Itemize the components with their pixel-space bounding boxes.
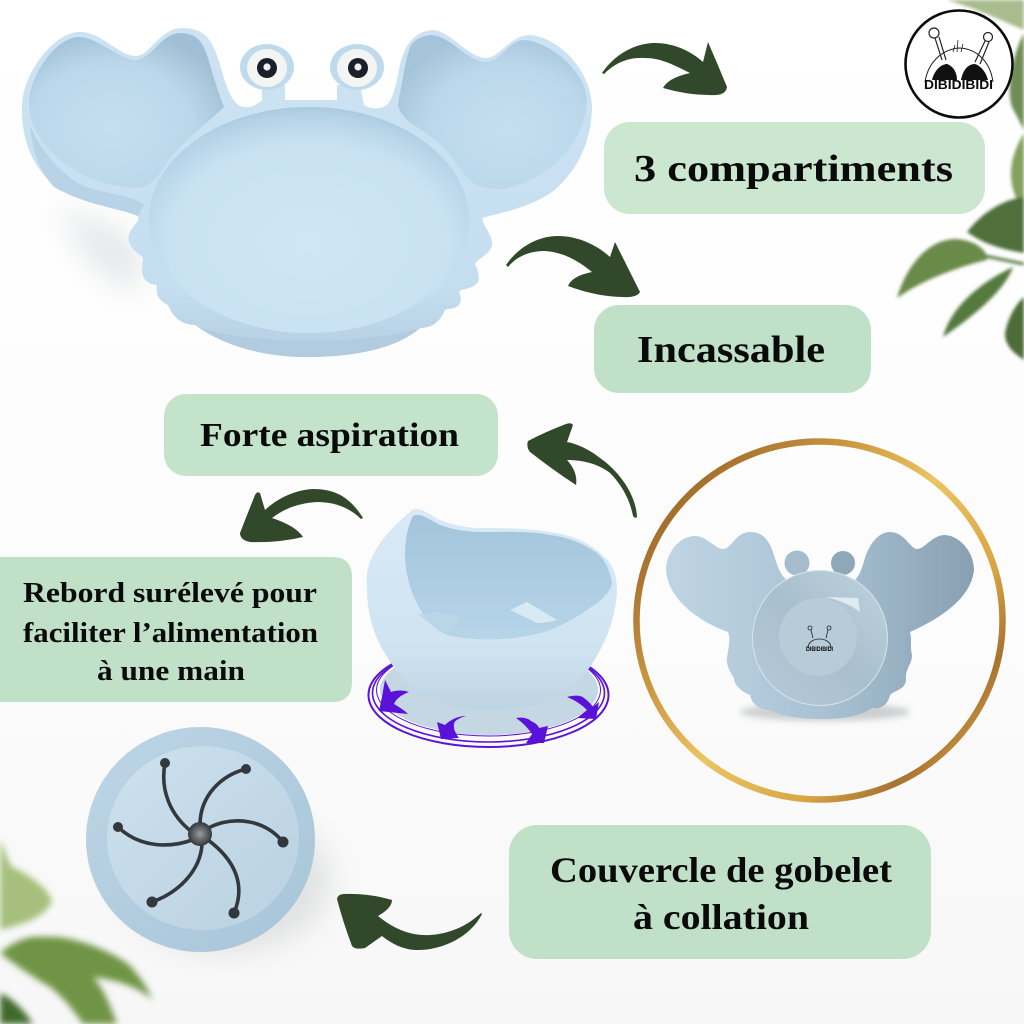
plant top right [897, 0, 1024, 360]
arrow to Forte aspiration [527, 423, 637, 518]
plate front wall [200, 328, 420, 357]
back body [666, 532, 974, 719]
label: 3 compartiments: 3 compartiments [634, 148, 953, 190]
gold circle [636, 442, 1002, 800]
label: Rebord: faciliter l’alimentation [23, 617, 318, 649]
suction bowl [367, 509, 617, 747]
lid shadow [120, 808, 330, 952]
crab plate back view [666, 532, 974, 721]
logo dome [925, 48, 993, 82]
label: Forte aspiration: Forte aspiration [200, 417, 459, 454]
disk center [779, 598, 857, 676]
bowl highlight [510, 602, 557, 623]
logo [906, 10, 1012, 118]
lid inner [107, 746, 299, 930]
label: Rebord [0, 557, 352, 702]
slit ends [113, 758, 288, 918]
suction base [380, 645, 598, 735]
arrow to Rebord [240, 489, 363, 542]
suction disk [752, 570, 888, 706]
back eyes [784, 550, 810, 576]
logo text: DIBIDIBIDI [924, 78, 993, 92]
purple arrows [379, 680, 599, 743]
left eye [240, 44, 294, 90]
logo antennae [929, 28, 992, 64]
arrow to Incassable [506, 236, 640, 297]
bowl reflection [418, 613, 458, 633]
shadow under plate [60, 205, 140, 290]
label: Rebord: Rebord surélevé pour [23, 577, 317, 609]
label: Couvercle: à collation [633, 897, 809, 937]
plate outline [22, 28, 592, 357]
bowl inner [405, 515, 612, 639]
main compartment [149, 107, 469, 333]
crab plate [22, 28, 592, 357]
disk highlight [825, 597, 860, 612]
small logo [806, 626, 833, 653]
lid outer [86, 727, 315, 952]
logo humps [932, 64, 988, 80]
arrow to 3 compartiments [602, 42, 727, 95]
snack cup lid [86, 727, 315, 952]
lid slits [118, 763, 283, 913]
label: Rebord: à une main [97, 655, 245, 687]
bowl outer [367, 509, 617, 710]
label: Incassable: Incassable [637, 329, 825, 371]
back eye right [831, 551, 855, 575]
plant bottom left [0, 840, 153, 1024]
left compartment [29, 33, 224, 188]
label: Couvercle [509, 825, 931, 959]
label: Couvercle: Couvercle de gobelet [550, 850, 892, 890]
purple suction rings [368, 643, 608, 747]
back shadow [740, 703, 910, 721]
arrow to lid [337, 894, 482, 950]
claw junction shadows [30, 125, 144, 216]
label: Incassable [594, 305, 871, 393]
right eye [330, 44, 384, 90]
small logo: DIBIDIBIDI [806, 647, 833, 653]
right compartment [398, 35, 587, 189]
label: 3 compartiments [604, 122, 985, 214]
label: Forte aspiration [164, 394, 498, 476]
lid hub [188, 822, 212, 846]
